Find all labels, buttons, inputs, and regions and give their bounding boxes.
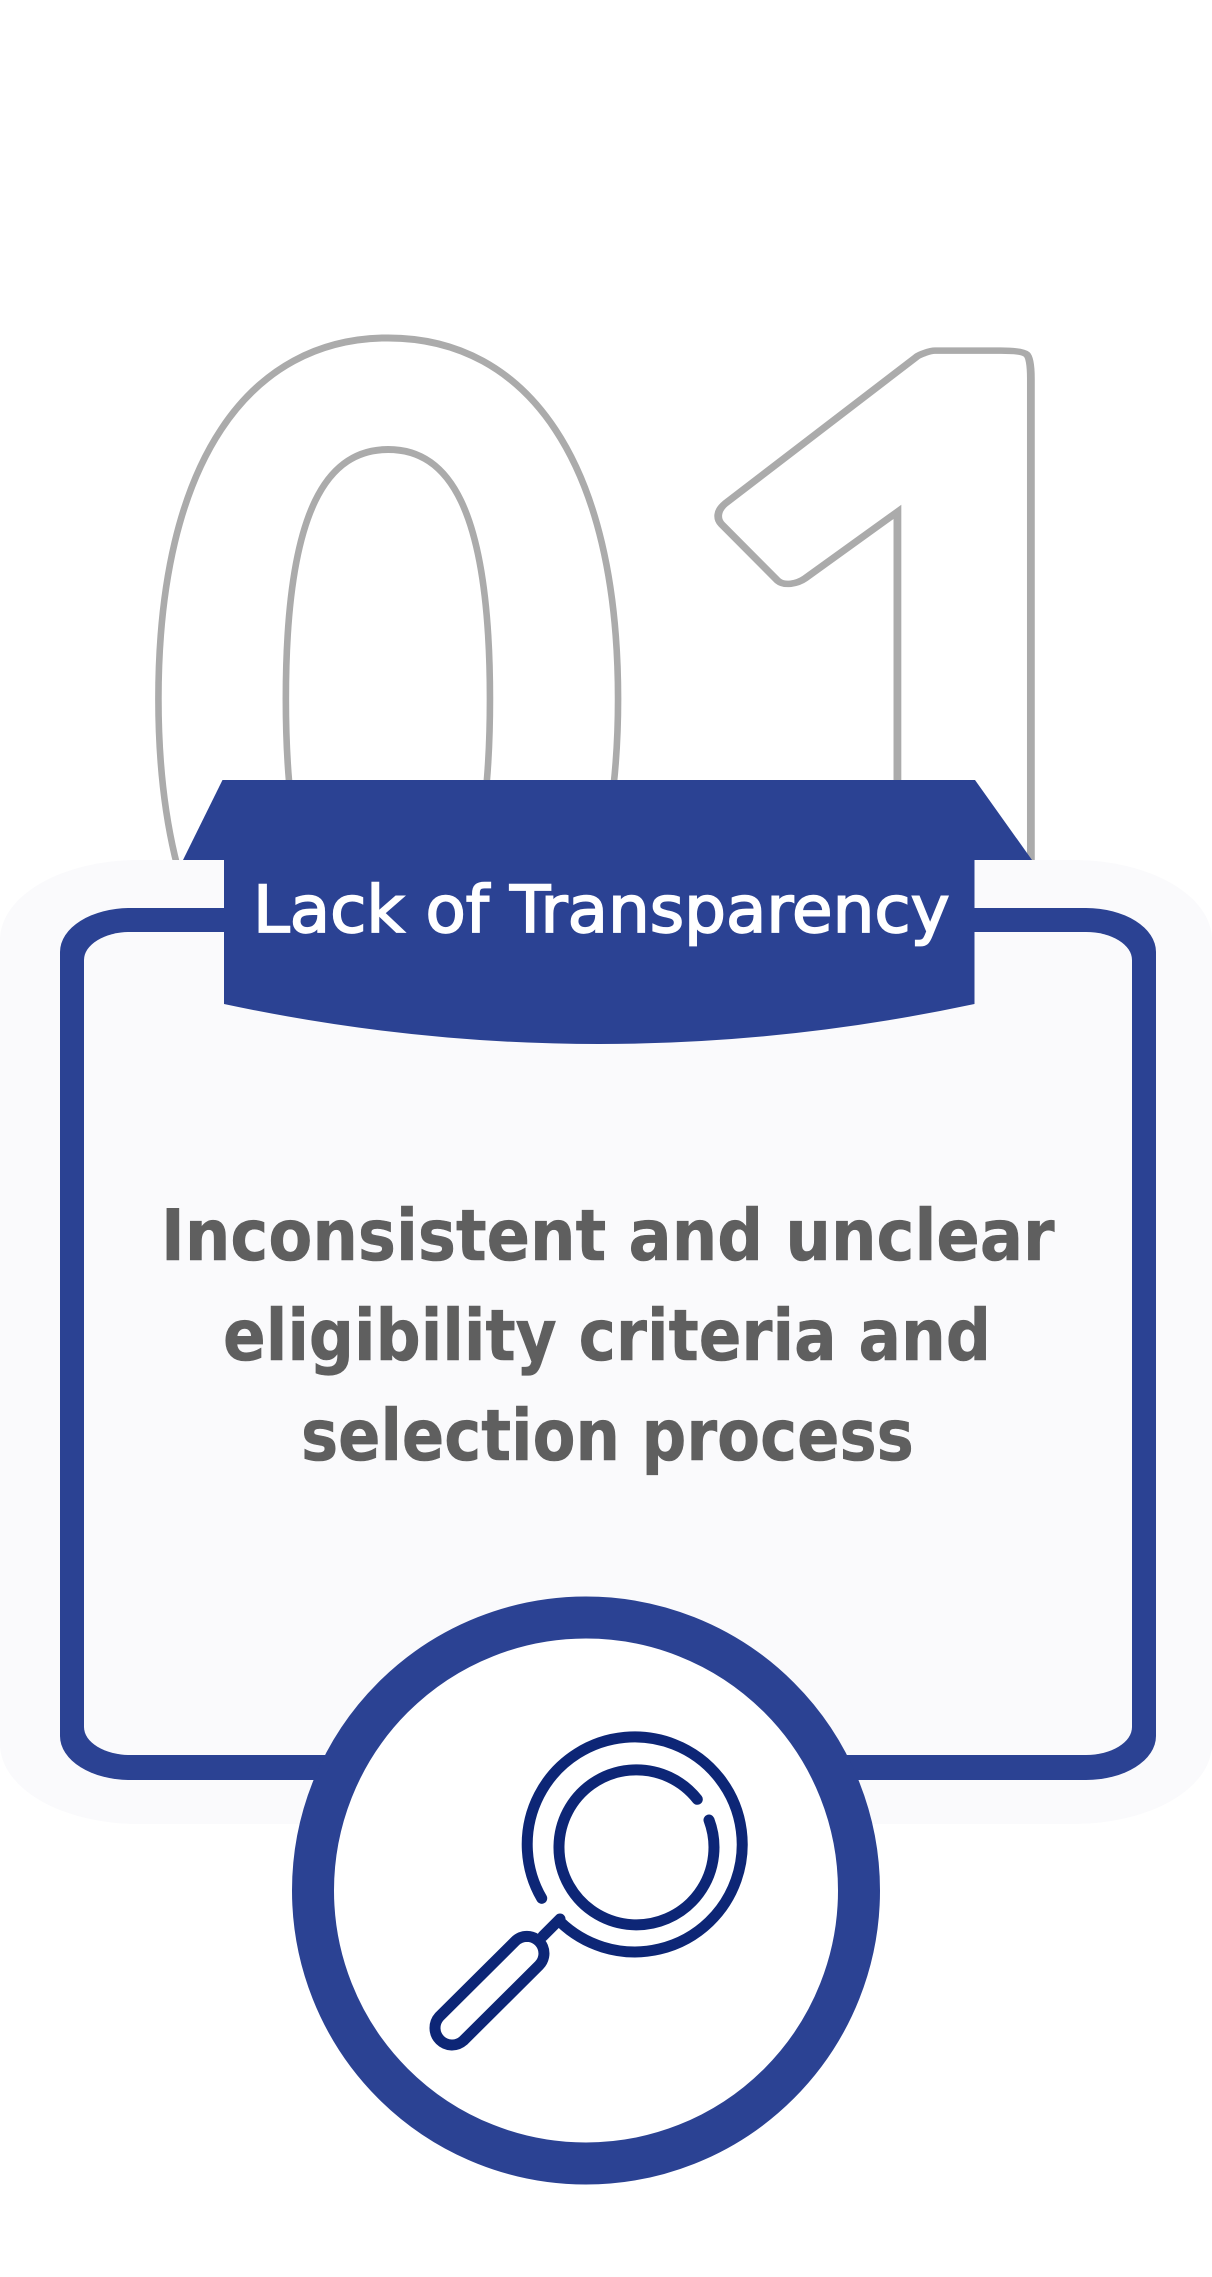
description text: selection process [301, 1394, 914, 1477]
icon circle [313, 1618, 859, 2164]
description text [161, 1194, 1055, 1477]
heading: Lack of Transparency: Lack of Transparency [253, 873, 950, 948]
description text: Inconsistent and unclear [161, 1194, 1055, 1277]
icon: magnifying glass [435, 1737, 742, 2045]
handle [435, 1936, 544, 2045]
ribbon back fold [183, 780, 1032, 860]
panel blue border [60, 908, 1156, 1780]
lens outer arc [527, 1737, 742, 1952]
ribbon front banner [224, 860, 974, 1044]
lens inner arc [559, 1770, 714, 1925]
panel background [0, 860, 1212, 1824]
description text: eligibility criteria and [223, 1294, 991, 1377]
